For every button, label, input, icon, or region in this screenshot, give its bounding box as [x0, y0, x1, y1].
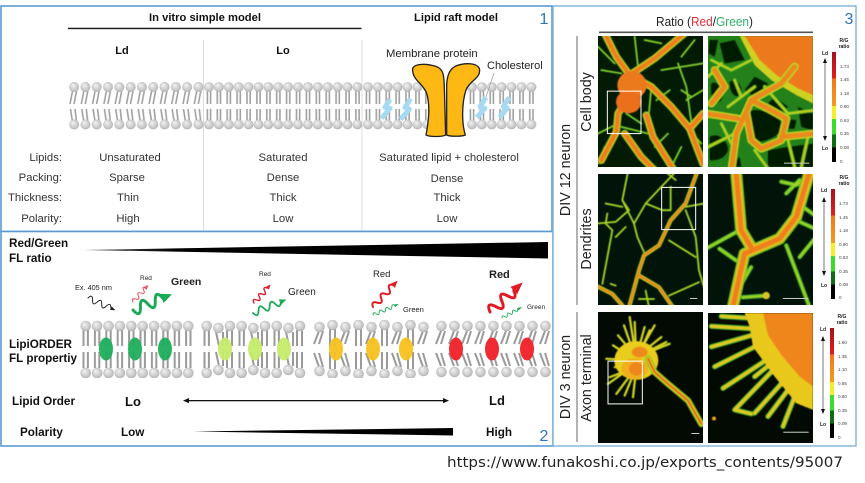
scale bar	[691, 433, 699, 434]
colorbar: dendrites: 0.35	[839, 269, 848, 274]
emission waves: green moderate: Green	[288, 287, 316, 298]
wedge: polarity	[193, 428, 453, 436]
property table: Packing:	[19, 172, 62, 184]
colorbar: dendrites: Ld	[821, 188, 827, 194]
colorbar: cell body: Lo	[822, 146, 828, 152]
image: cell body overview	[598, 36, 703, 167]
colorbar: axon terminal	[820, 314, 847, 440]
panel 1: in vitro and lipid raft models	[1, 6, 552, 232]
property table: Saturated	[258, 152, 308, 164]
colorbar: axon terminal: 0.85	[838, 381, 847, 386]
colorbar: cell body: 0	[840, 159, 843, 164]
wedge: red/green ratio	[83, 242, 548, 258]
property table: Polarity:	[21, 213, 62, 225]
emission waves: red moderate: Green	[403, 305, 424, 314]
colorbar: dendrites: Lo	[821, 283, 827, 289]
membrane protein	[413, 64, 480, 136]
label: Polarity: Polarity	[20, 426, 63, 439]
colorbar: dendrites: 1.73	[839, 201, 848, 206]
heading: Ratio (Red/Green): Ratio (Red/Green)	[656, 14, 753, 29]
emission waves: green dominant	[131, 275, 201, 315]
colorbar: axon terminal: R/G	[838, 314, 847, 320]
label: Cholesterol	[486, 60, 543, 97]
emission waves: green dominant: Red	[140, 275, 152, 282]
image: dendrites zoom	[708, 174, 813, 305]
emission waves: red dominant: Red	[489, 269, 510, 281]
label: Low: Low	[121, 426, 145, 439]
colorbar: axon terminal: Ld	[820, 327, 826, 333]
image: dendrites overview	[598, 174, 703, 305]
property table: Dense	[431, 173, 463, 185]
label: Red/Green FL ratio: FL ratio	[9, 252, 52, 265]
heading: In vitro simple model: In vitro simple model	[149, 12, 261, 24]
label: LipiORDER FL propertiy: LipiORDER	[9, 338, 72, 351]
scale bar	[783, 298, 808, 299]
property table: Thick	[270, 192, 297, 204]
label: DIV 3 neuron: DIV 3 neuron	[558, 335, 574, 419]
property table: Low	[273, 213, 294, 225]
panel number 1: 1	[540, 11, 549, 28]
inset box	[607, 91, 641, 134]
cholesterol molecules	[382, 97, 509, 119]
colorbar: axon terminal: 1.60	[838, 340, 847, 345]
colorbar: cell body: Ld	[822, 51, 828, 57]
colorbar: dendrites: ratio	[839, 181, 849, 187]
colorbar: cell body: 1.45	[840, 77, 849, 82]
emission waves: red dominant	[486, 269, 545, 319]
membrane: ordered, green probe	[80, 320, 194, 378]
colorbar: cell body: 1.18	[840, 91, 849, 96]
colorbar: axon terminal: ratio	[837, 320, 847, 326]
colorbar: dendrites: 1.45	[839, 215, 848, 220]
membrane: light green probe	[201, 320, 306, 378]
colorbar: dendrites: 0	[839, 295, 842, 300]
emission waves: red moderate: Red	[373, 269, 390, 280]
colorbar: cell body: 0.90	[840, 104, 849, 109]
scale bar	[690, 298, 697, 299]
column heading: Ld: Ld	[115, 45, 129, 57]
colorbar: cell body: ratio	[839, 44, 849, 50]
column heading: Lo: Lo	[276, 45, 290, 57]
property table: Dense	[267, 172, 299, 184]
label: Lo: Lo	[125, 394, 141, 409]
scale bar	[783, 431, 809, 434]
membrane: orange probe	[313, 320, 430, 378]
label: Membrane protein: Membrane protein	[386, 48, 478, 60]
label: Red/Green FL ratio: Red/Green	[9, 237, 68, 250]
label: LipiORDER FL propertiy: FL propertiy	[9, 352, 77, 365]
colorbar: dendrites: 1.18	[839, 228, 848, 233]
colorbar: axon terminal: 0	[838, 435, 841, 440]
colorbar: dendrites: 0.63	[839, 255, 848, 260]
bilayer: lipid raft right	[467, 81, 536, 131]
colorbar: dendrites: 0.90	[839, 242, 848, 247]
membrane: red probe	[435, 320, 552, 378]
colorbar: cell body: 1.73	[840, 64, 849, 69]
colorbar: dendrites: R/G	[840, 175, 849, 181]
property table: Thin	[117, 192, 139, 204]
label: DIV 12 neuron: DIV 12 neuron	[558, 124, 574, 216]
bilayer: lipid raft left	[363, 81, 433, 131]
property table: Saturated lipid + cholesterol	[379, 152, 519, 164]
label: Cell body: Cell body	[579, 71, 595, 132]
property table: Unsaturated	[99, 152, 161, 164]
property table: High	[116, 213, 140, 225]
heading: Lipid raft model: Lipid raft model	[414, 12, 498, 24]
emission waves: red moderate	[371, 269, 424, 317]
panel number 3: 3	[845, 11, 854, 28]
label: Ex. 405 nm: Ex. 405 nm	[75, 283, 112, 292]
bilayer: Lo ordered	[204, 81, 362, 131]
emission waves: green moderate	[252, 271, 316, 316]
colorbar: axon terminal: Lo	[820, 422, 826, 428]
label: Dendrites: Dendrites	[579, 208, 595, 270]
property table: Sparse	[109, 172, 145, 184]
emission waves: green dominant: Green	[171, 276, 201, 288]
label: Lipid Order: Lipid Order	[12, 395, 75, 408]
property table	[8, 152, 519, 225]
source URL: https://www.funakoshi.co.jp/exports_contents/95007	[447, 455, 843, 471]
image: axon terminal zoom	[708, 313, 813, 443]
inset box	[608, 361, 642, 404]
heading rule	[68, 28, 362, 29]
colorbar: cell body: 0.35	[840, 131, 849, 136]
colorbar: cell body	[822, 38, 849, 164]
heading rule	[599, 32, 813, 33]
colorbar: axon terminal: 0.09	[838, 421, 847, 426]
label: Ld: Ld	[489, 393, 505, 408]
emission waves: red dominant: Green	[527, 304, 545, 311]
colorbar: cell body: 0.63	[840, 118, 849, 123]
colorbar: dendrites: 0.08	[839, 282, 848, 287]
emission waves: green moderate: Red	[259, 271, 271, 278]
image: cell body zoom	[708, 36, 813, 167]
bilayer: Ld disordered	[68, 81, 204, 131]
panel number 2: 2	[540, 428, 549, 445]
colorbar: cell body: R/G	[840, 38, 849, 44]
arrow: lipid order	[183, 398, 449, 403]
colorbar: dendrites	[821, 175, 849, 300]
label: High: High	[486, 426, 512, 439]
colorbar: axon terminal: 0.60	[838, 394, 847, 399]
panel 2: LipiORDER fluorescence properties	[1, 232, 553, 446]
property table: Thick	[434, 192, 461, 204]
colorbar: axon terminal: 1.35	[838, 354, 847, 359]
label: Axon terminal: Axon terminal	[579, 334, 595, 422]
inset box	[662, 187, 696, 230]
image: axon terminal overview	[598, 312, 703, 443]
property table: Thickness:	[8, 192, 62, 204]
scale bar	[784, 163, 809, 164]
colorbar: cell body: 0.08	[840, 145, 849, 150]
colorbar: axon terminal: 1.10	[838, 367, 847, 372]
panel 3: neuron ratio images	[553, 6, 856, 446]
label: Cholesterol: Cholesterol	[487, 60, 543, 72]
property table: Low	[437, 213, 458, 225]
excitation wave arrow	[87, 295, 117, 313]
colorbar: axon terminal: 0.35	[838, 408, 847, 413]
property table: Lipids:	[29, 152, 62, 164]
